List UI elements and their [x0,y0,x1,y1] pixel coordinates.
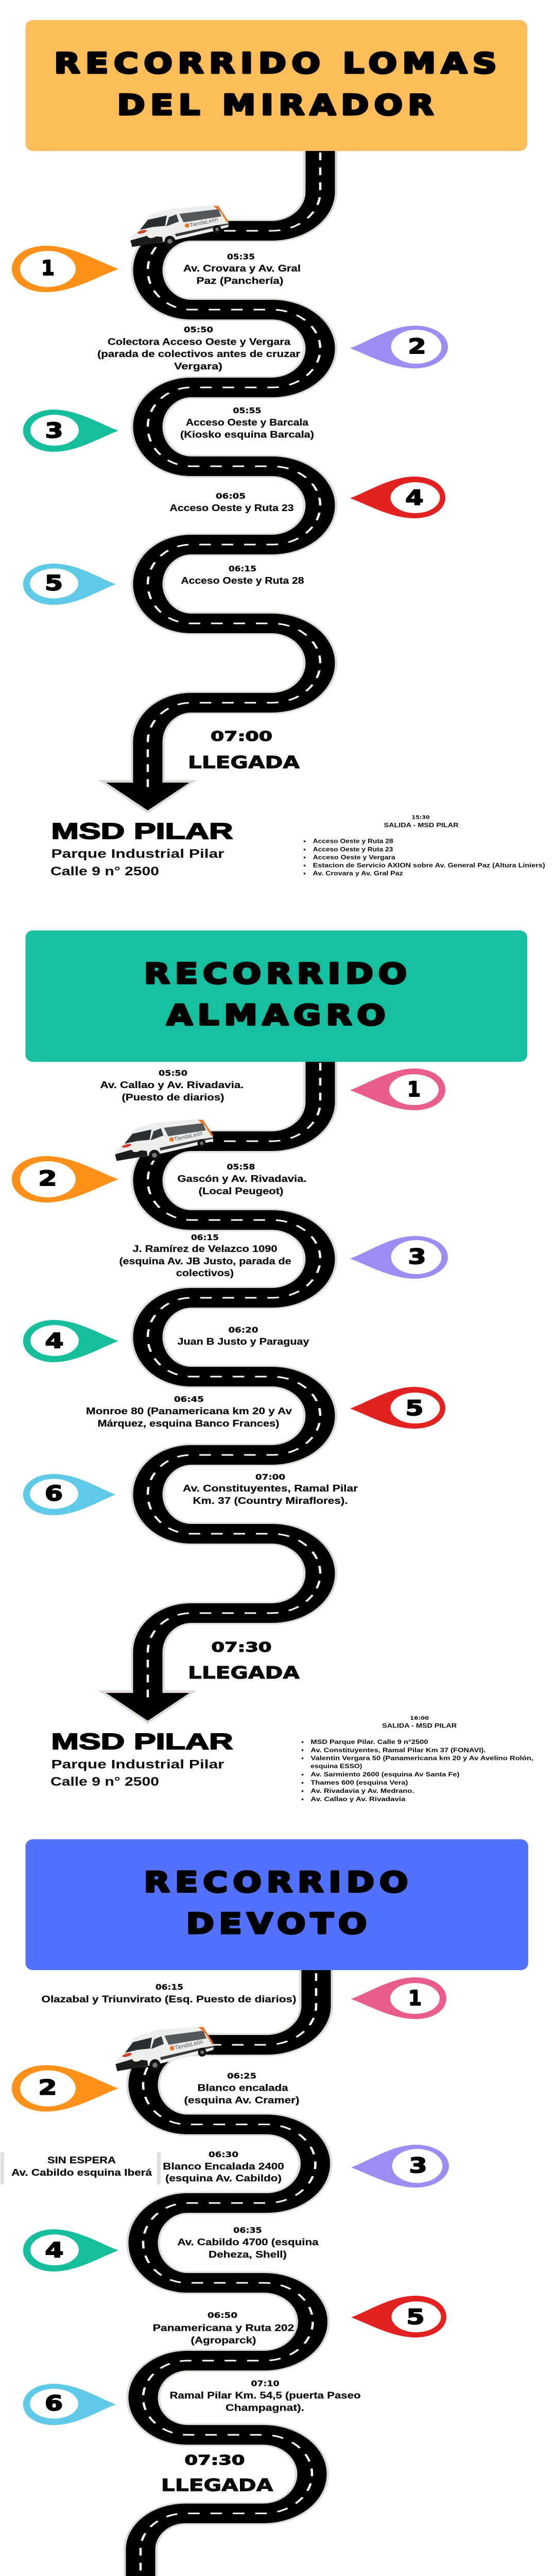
return list: MSD Parque Pilar. Calle 9 n°2500 [310,1738,428,1745]
stop 5 text [181,564,304,586]
stop 5 text: 06:45 [174,1395,204,1404]
icon: van Devoto [115,2026,214,2071]
pin 2 purple: 2 [408,335,426,359]
stop 5 text: 06:15 [229,564,256,573]
pin 4 teal: 4 [45,1329,64,1353]
stop 3 text: (esquina Av. JB Justo, parada de [119,1256,291,1266]
pin 2 purple [350,326,448,368]
title panel Almagro: RECORRIDO [144,958,407,990]
stop 2 text [184,2071,300,2106]
return list: 16:00 [410,1716,429,1721]
stop 1 text: Paz (Panchería) [197,276,283,286]
pin 2 orange: 2 [38,2076,57,2100]
stop 1 text: 05:50 [159,1069,187,1078]
pin 5 red: 5 [407,2306,424,2329]
pin 5 red [351,2296,446,2337]
pin 1 pink [350,1069,445,1110]
road centre dashes Almagro [148,1063,320,1703]
stop 5 text: Panamericana y Ruta 202 [153,2323,294,2333]
pin 5 red [350,1387,445,1429]
pin 6 blue [23,1474,116,1515]
stop 5 text: Márquez, esquina Banco Frances) [98,1418,280,1429]
arrival label: 07:00 [211,729,272,744]
stop 2 text: Colectora Acceso Oeste y Vergara [108,336,291,347]
pin 1 pink: 1 [408,1987,422,2010]
stop 2 text [97,325,300,371]
return list: Acceso Oeste y Ruta 28 [313,838,393,845]
stop 2 text: Vergara) [174,361,222,371]
note: sin espera: Av. Cabildo esquina Iberá [11,2167,152,2178]
stop 3 text: (esquina Av. Cabildo) [165,2173,282,2183]
pin 3 teal: 3 [45,419,63,443]
stop 6 text: Km. 37 (Country Miraflores). [193,1496,348,1506]
arrival label: LLEGADA [161,2475,273,2495]
stop 2 text: Gascón y Av. Rivadavia. [177,1174,307,1184]
arrow head Almagro [98,1678,197,1724]
stop 5 text: 06:50 [207,2311,237,2320]
destination block [50,819,233,878]
icon: van Devoto: TiendaLeón [174,2039,203,2052]
stop 3 text: J. Ramírez de Velazco 1090 [133,1244,277,1254]
stop 6 text: Champagnat). [226,2403,304,2413]
return list: esquina ESSO) [310,1762,362,1770]
return list: SALIDA - MSD PILAR [384,821,459,828]
return list: Av. Sarmiento 2600 (esquina Av Santa Fe) [310,1771,459,1778]
destination block: Parque Industrial Pilar [51,847,224,861]
stop 5 text [86,1395,292,1429]
return list [302,1716,533,1803]
road: winding route Devoto [141,1965,316,2576]
stop 4 text: 06:05 [216,492,246,501]
stop 5 text: (Agroparck) [191,2335,256,2346]
pin 4 teal [23,2229,118,2272]
stop 2 text: (esquina Av. Cramer) [184,2095,300,2106]
pin 3 purple: 3 [409,2154,427,2178]
stop 1 text [100,1069,244,1103]
return list: Estacion de Servicio AXION sobre Av. General Paz (Altura Liniers) [313,861,545,869]
stop 2 text: Blanco encalada [198,2083,289,2093]
stop 6 text [183,1472,358,1506]
arrival label [161,2453,273,2495]
stop 1 text [41,1982,297,2004]
stop 3 text [163,2150,284,2183]
arrow head Lomas [98,768,197,814]
stop 5 text: Acceso Oeste y Ruta 28 [181,575,304,586]
stop 2 text: (Local Peugeot) [199,1186,283,1196]
pin 6 blue: 6 [45,2392,63,2415]
stop 6 text [170,2379,360,2413]
road: winding route Lomas [148,144,320,786]
arrival label [188,1640,300,1683]
stop 1 text: Av. Crovara y Av. Gral [183,263,301,274]
stop 3 text: colectivos) [176,1268,234,1278]
destination block: Parque Industrial Pilar [51,1757,224,1771]
road centre dashes Lomas [148,152,320,792]
stop 4 text: Juan B Justo y Paraguay [177,1336,309,1347]
pin 4 red: 4 [406,486,423,510]
pin 5 blue: 5 [45,572,63,596]
pin 4 teal: 4 [45,2239,64,2263]
destination block: MSD PILAR [51,819,233,844]
stop 4 text: 06:35 [233,2226,262,2235]
stop 2 text: 06:25 [227,2071,256,2080]
destination block: MSD PILAR [51,1729,233,1754]
title panel Devoto [26,1839,528,1970]
title panel Devoto: RECORRIDO [144,1867,408,1899]
arrival label: 07:30 [211,1640,272,1655]
note: sin espera: SIN ESPERA [47,2155,116,2165]
stop 3 text [180,406,314,440]
pin 4 red [350,477,445,518]
stop 1 text: 06:15 [155,1982,183,1992]
stop 1 text: Av. Callao y Av. Rivadavia. [100,1080,244,1090]
pin 1 pink: 1 [407,1078,421,1101]
return list: SALIDA - MSD PILAR [382,1722,457,1730]
stop 3 text: (Kiosko esquina Barcala) [180,430,314,440]
stop 4 text: Av. Cabildo 4700 (esquina [177,2237,319,2247]
return list: Av. Callao y Av. Rivadavia [310,1795,406,1803]
stop 3 text: Acceso Oeste y Barcala [186,417,309,428]
pin 3 teal [23,410,118,452]
pin 2 orange [12,2065,118,2111]
icon: van Almagro: TiendaLeón [174,1130,203,1143]
pin 3 purple: 3 [408,1245,426,1269]
pin 3 purple [351,2145,449,2188]
stop 4 text: Acceso Oeste y Ruta 23 [170,503,293,513]
arrival label [188,729,300,772]
arrival label: LLEGADA [188,1663,300,1683]
return list [304,815,545,877]
stop 4 text: Deheza, Shell) [209,2249,287,2260]
section: Recorrido Almagro [12,930,533,1803]
stop 6 text: 07:00 [255,1472,285,1482]
return list: Av. Constituyentes, Ramal Pilar Km 37 (FONAVI). [310,1747,486,1754]
return list: Valentin Vergara 50 (Panamericana km 20 y Av Avelino Rolón, [310,1755,533,1762]
return list: Av. Rivadavia y Av. Medrano. [310,1787,414,1794]
stop 5 text: Monroe 80 (Panamericana km 20 y Av [86,1406,292,1416]
icon: van Lomas: TiendaLeón [189,216,218,229]
title panel Almagro [26,930,527,1062]
arrival label: LLEGADA [188,752,300,772]
pin 1 orange: 1 [41,257,55,280]
pin 1 pink [351,1977,446,2019]
stop 2 text: (parada de colectivos antes de cruzar [97,349,300,359]
stop 4 text [177,2226,319,2260]
return list: 15:30 [412,815,430,821]
stop 2 text: 05:58 [227,1162,255,1172]
pin 2 orange [12,1156,118,1202]
stop 1 text: (Puesto de diarios) [122,1092,224,1103]
stop 6 text: Av. Constituyentes, Ramal Pilar [183,1483,358,1494]
stop 3 text: 05:55 [233,406,262,415]
return list: Av. Crovara y Av. Gral Paz [313,870,403,877]
title panel Lomas: RECORRIDO LOMAS [54,48,497,80]
destination block: Calle 9 n° 2500 [50,1775,159,1789]
pin 4 teal [23,1320,118,1362]
stop 2 text: 05:50 [184,325,213,334]
stop 1 text [183,252,301,286]
section: Recorrido Devoto [1,1839,528,2576]
icon: van Almagro [115,1119,213,1161]
stop 6 text: Ramal Pilar Km. 54,5 (puerta Paseo [170,2391,360,2401]
title panel Almagro: ALMAGRO [167,999,385,1032]
stop 4 text [170,492,293,513]
stop 5 text [153,2311,294,2346]
pin 5 blue [23,564,116,605]
pin 3 purple [350,1236,448,1279]
stop 2 text [177,1162,307,1196]
pin 5 red: 5 [406,1397,423,1420]
stop 4 text: 06:20 [229,1325,258,1334]
return list: Acceso Oeste y Vergara [313,854,395,861]
arrival label: 07:30 [184,2453,245,2468]
stop 3 text: 06:15 [191,1233,219,1242]
return list: Acceso Oeste y Ruta 23 [313,845,393,853]
pin 2 orange: 2 [38,1167,57,1191]
stop 6 text: 07:10 [251,2379,279,2388]
stop 3 text: Blanco Encalada 2400 [163,2161,284,2172]
stop 3 text: 06:30 [209,2150,238,2159]
stop 1 text: Olazabal y Triunvirato (Esq. Puesto de diarios) [41,1994,297,2004]
section: Recorrido Lomas del Mirador [12,20,545,878]
road: winding route Almagro [148,1055,320,1696]
road centre dashes Devoto [141,1973,316,2576]
pin 1 orange [12,246,118,292]
stop 3 text [119,1233,291,1278]
title panel Devoto: DEVOTO [186,1908,367,1940]
title panel Lomas: DEL MIRADOR [117,90,434,122]
destination block [50,1729,233,1789]
stop 1 text: 05:35 [227,252,255,261]
title panel Lomas [26,20,527,151]
note: sin espera [1,2153,161,2184]
icon: van Lomas [130,205,229,247]
stop 4 text [177,1325,309,1347]
return list: Thames 600 (esquina Vera) [310,1779,408,1786]
destination block: Calle 9 n° 2500 [50,865,159,878]
pin 6 blue: 6 [45,1482,63,1505]
pin 6 blue [23,2384,116,2425]
